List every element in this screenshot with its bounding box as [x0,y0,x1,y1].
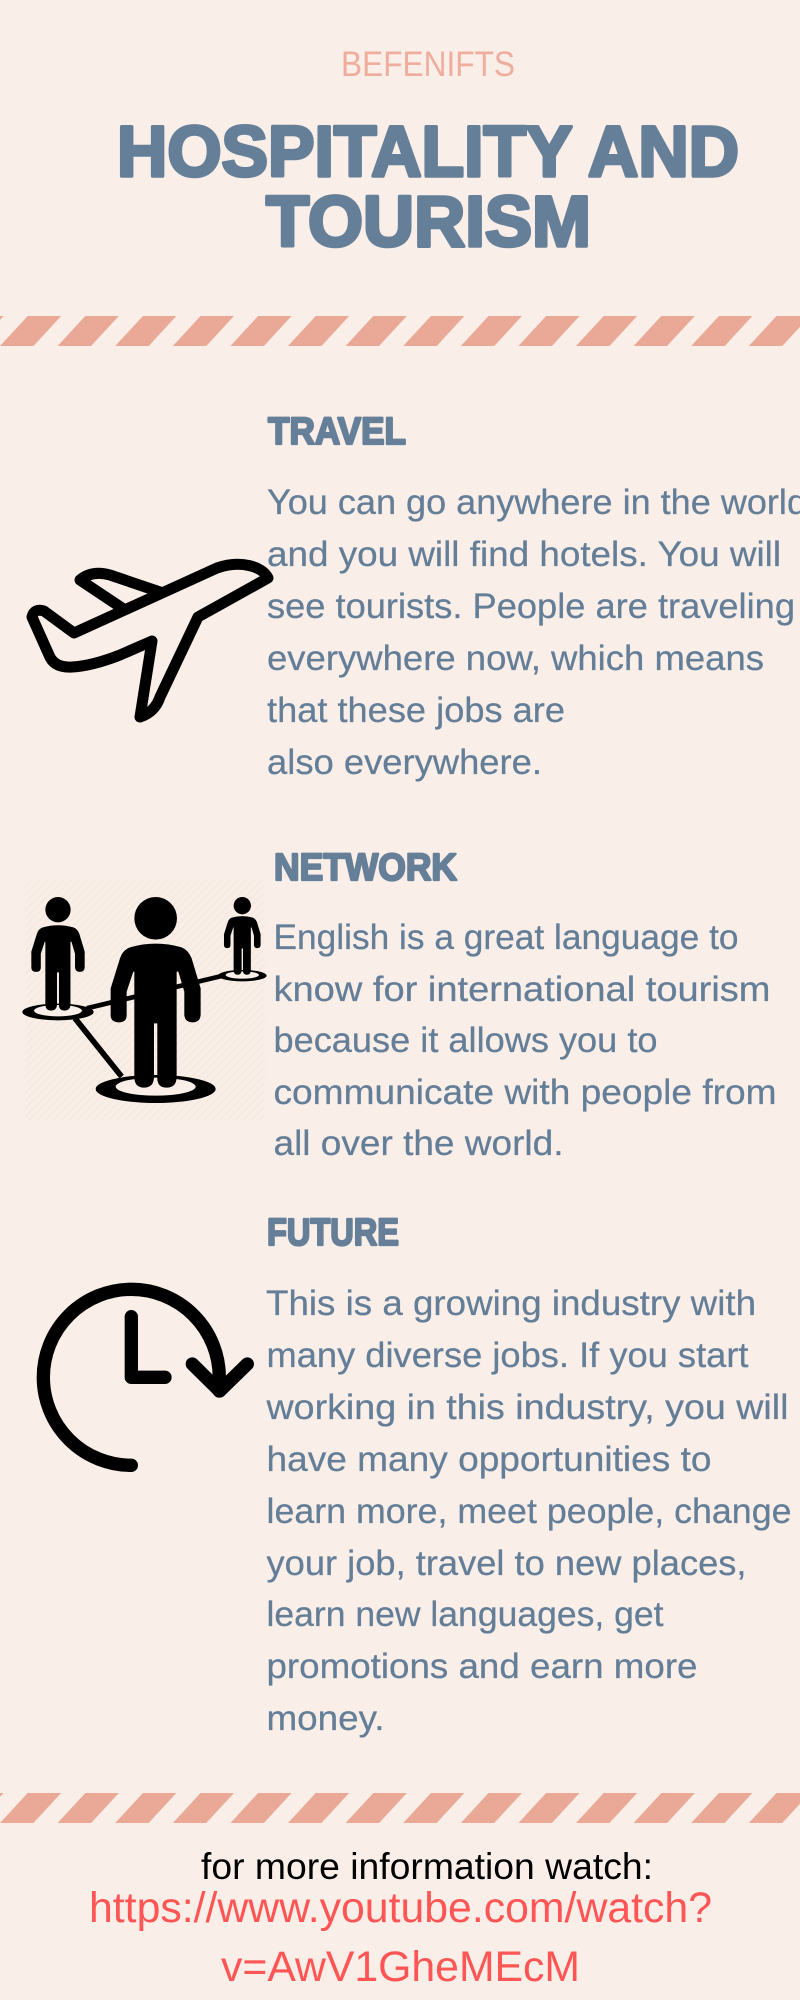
text block: future: This is a growing industry with [266,1284,756,1323]
text block: network [274,918,776,1163]
text block: travel: You can go anywhere in the world [267,483,800,522]
text block: network: because it allows you to [274,1021,658,1060]
eyebrow label: BEFENIFTS [341,45,515,84]
text block: future: learn new languages, get [266,1595,664,1634]
text block: network: all over the world. [274,1124,564,1163]
footer link: https://www.youtube.com/watch? [89,1884,712,1932]
footer link [89,1884,712,1991]
text block: future: money. [266,1699,384,1738]
text block: travel: everywhere now, which means [267,639,764,678]
text block: future: have many opportunities to [266,1440,712,1479]
text block: travel: also everywhere. [267,743,542,782]
section: network [22,847,776,1163]
text block: future: learn more, meet people, change [266,1492,792,1531]
text block: future: promotions and earn more [266,1647,698,1686]
text block: travel: and you will find hotels. You will [267,535,781,574]
text block: future: your job, travel to new places, [266,1544,746,1583]
text block: future [265,1284,792,1738]
icon: clock with arrow [43,1289,247,1465]
title [117,113,739,262]
text block: future: many diverse jobs. If you start [266,1336,749,1375]
footer: more information [89,1845,712,1991]
section: travel [32,411,800,782]
title: TOURISM [266,183,591,262]
footer link: v=AwV1GheMEcM [221,1943,580,1991]
title: HOSPITALITY AND [117,113,739,192]
heading: network: NETWORK [274,847,458,889]
text block: network: English is a great language to [274,918,738,957]
icon: people network [22,880,267,1120]
section: future [43,1212,792,1738]
text block: network: communicate with people from [274,1073,776,1112]
heading: future: FUTURE [267,1212,399,1254]
text block: network: know for international tourism [274,970,770,1009]
footer caption: for more information watch: [201,1845,653,1887]
text block: future: working in this industry, you will [265,1388,788,1427]
heading: travel: TRAVEL [268,411,406,453]
text block: travel: see tourists. People are traveling [267,587,795,626]
icon: airplane [32,564,268,717]
text block: travel: that these jobs are [267,691,565,730]
text block: travel [267,483,800,782]
